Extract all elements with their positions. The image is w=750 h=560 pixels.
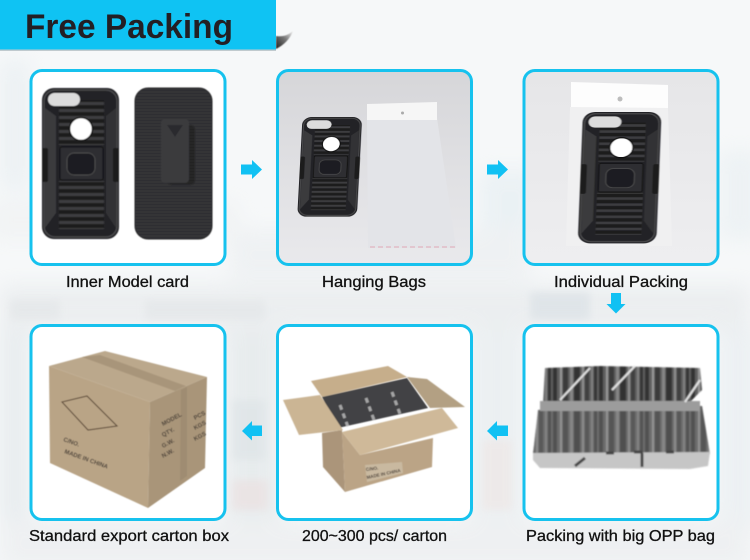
label: Individual Packing: Individual Packing bbox=[554, 274, 688, 291]
bundle of phone cases bbox=[533, 366, 710, 469]
arrow: step 5 to 6 bbox=[242, 421, 262, 440]
arrow: step 4 to 5 bbox=[487, 421, 508, 440]
header banner bbox=[0, 0, 293, 51]
phone case back with belt clip bbox=[135, 88, 212, 239]
carton label: C/NO. bbox=[366, 466, 379, 472]
banner fold shadow bbox=[276, 31, 293, 49]
closed carton box bbox=[49, 351, 207, 508]
panel: individual packing bbox=[524, 70, 718, 264]
side box print: N.W. bbox=[161, 448, 176, 460]
side box print: KGS bbox=[193, 420, 207, 432]
open carton box bbox=[283, 366, 465, 492]
title: Free Packing bbox=[25, 8, 233, 46]
front box print: MADE IN CHINA bbox=[63, 449, 109, 471]
label: 200~300 pcs/ carton: 200~300 pcs/ carton bbox=[302, 528, 447, 545]
label: Hanging Bags: Hanging Bags bbox=[322, 274, 426, 291]
phone case bbox=[297, 117, 362, 217]
panel: open carton bbox=[278, 326, 472, 520]
label: Inner Model card: Inner Model card bbox=[66, 274, 189, 291]
carton label bbox=[365, 462, 403, 482]
carton label: MADE IN CHINA bbox=[366, 468, 402, 480]
side box print: G.W. bbox=[161, 438, 176, 450]
panel: inner model card bbox=[31, 70, 225, 264]
side box print: KGS bbox=[193, 431, 207, 443]
panel: standard export carton bbox=[31, 326, 225, 520]
front box print bbox=[62, 437, 109, 471]
side box print: MODEL bbox=[161, 412, 183, 428]
empty hanging bag bbox=[367, 102, 456, 248]
OPP bag with card header bbox=[566, 82, 672, 246]
phone case front bbox=[42, 88, 119, 239]
front box print: C/NO. bbox=[62, 437, 80, 449]
arrow: step 2 to 3 bbox=[487, 160, 508, 179]
arrow: down to OPP bag bbox=[606, 293, 626, 314]
panel: OPP bag bundle bbox=[524, 326, 718, 520]
phone case in bag bbox=[578, 112, 662, 243]
diamond mark bbox=[62, 396, 117, 430]
label: Standard export carton box: Standard export carton box bbox=[29, 528, 229, 545]
arrow: step 1 to 2 bbox=[241, 160, 262, 179]
side box print: QTY. bbox=[161, 427, 176, 439]
side box print: PCS bbox=[193, 411, 207, 422]
side box print bbox=[161, 411, 207, 460]
panel: hanging bags bbox=[278, 70, 472, 264]
label: Packing with big OPP bag: Packing with big OPP bag bbox=[526, 528, 715, 545]
